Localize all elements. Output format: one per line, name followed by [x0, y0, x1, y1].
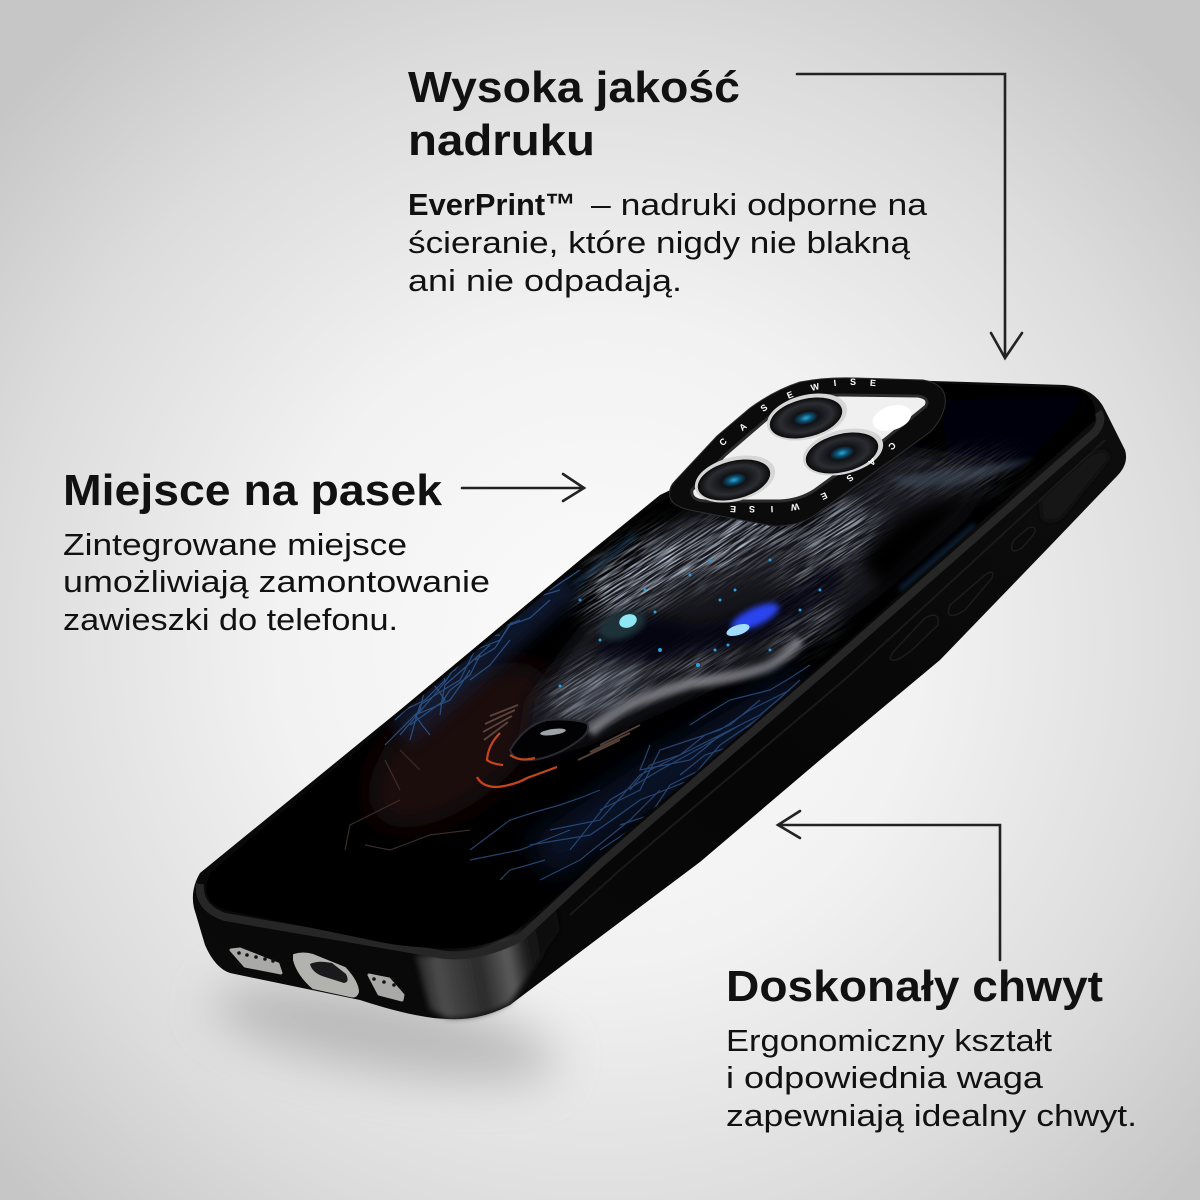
brand lettering: W	[789, 501, 800, 513]
brand lettering: C	[717, 436, 729, 448]
rim highlight	[200, 412, 1100, 955]
right lens	[798, 421, 888, 483]
body text: umożliwiają zamontowanie	[63, 564, 490, 599]
brand lettering: E	[819, 490, 829, 502]
body text	[408, 187, 928, 298]
brand lettering: E	[785, 389, 795, 401]
left eye	[598, 606, 647, 642]
mouth hair	[483, 705, 640, 760]
blue side glow	[575, 525, 975, 590]
flash	[869, 400, 915, 436]
brand lettering: E	[870, 378, 876, 388]
arrow: strap slot	[462, 474, 584, 501]
left vein glow	[400, 580, 570, 730]
case body	[193, 380, 1126, 1019]
wolf head fill	[520, 450, 1000, 760]
left blue veins	[385, 570, 580, 745]
brand lettering: C	[886, 440, 898, 452]
right speaker holes	[372, 977, 396, 987]
dark eye band	[595, 560, 845, 665]
camera glass	[692, 395, 927, 501]
top lens	[762, 386, 852, 448]
body text: ani nie odpadają.	[408, 263, 682, 298]
body text: Ergonomiczny kształt	[726, 1023, 1052, 1058]
brand lettering: S	[845, 472, 855, 484]
camera plate	[670, 377, 945, 526]
body text: zapewniają idealny chwyt.	[726, 1098, 1137, 1133]
mouth red outline	[477, 733, 557, 787]
reddish muzzle glow	[362, 659, 545, 835]
right glowing eye	[725, 598, 782, 638]
ear shadow	[860, 490, 980, 590]
body text: ścieranie, które nigdy nie blakną	[408, 225, 911, 260]
arrow: print quality	[797, 74, 1022, 358]
body text	[726, 1023, 1137, 1133]
left speaker	[231, 949, 281, 973]
heading: Miejsce na pasek	[63, 466, 443, 515]
charging port	[294, 954, 358, 996]
body text: zawieszki do telefonu.	[63, 602, 398, 637]
body text: i odpowiednia waga	[726, 1060, 1044, 1095]
heading: nadruku	[408, 116, 595, 165]
nose highlight	[540, 728, 566, 736]
muzzle upper fur	[553, 656, 646, 722]
arrow: grip	[778, 811, 1000, 960]
brand lettering: A	[866, 456, 878, 468]
body text: Zintegrowane miejsce	[63, 527, 407, 562]
body text	[63, 527, 490, 637]
callout: strap slot	[63, 466, 490, 637]
bottom ports	[231, 949, 403, 1000]
body text: EverPrint™	[408, 187, 576, 222]
right vein glow	[540, 690, 805, 860]
brand lettering: S	[749, 504, 755, 514]
brand lettering: W	[810, 381, 821, 393]
side button lower	[890, 615, 938, 660]
brown lower branches	[345, 750, 470, 850]
heading	[408, 63, 740, 165]
heading: Wysoka jakość	[408, 63, 740, 112]
nose	[510, 719, 588, 760]
heading: Doskonały chwyt	[726, 962, 1103, 1011]
right speaker	[369, 975, 403, 1000]
phone case	[192, 377, 1126, 1022]
sparkles	[558, 558, 822, 688]
artwork	[206, 383, 1096, 948]
navy corner	[942, 396, 1080, 469]
power button bump	[1040, 451, 1108, 521]
right blue veins	[470, 665, 810, 880]
callout: print quality	[408, 63, 928, 298]
brand lettering: E	[730, 504, 736, 514]
fur texture	[532, 444, 1028, 731]
ear edge	[885, 458, 1035, 488]
mute switch	[1012, 527, 1035, 551]
charging hole	[310, 962, 348, 983]
art base	[190, 370, 1110, 970]
brand lettering	[717, 377, 898, 514]
phone shadow	[206, 962, 564, 1102]
sidewall groove	[570, 440, 1105, 915]
left lens	[690, 448, 780, 510]
corner gloss	[415, 905, 560, 1018]
body text: – nadruki odporne na	[591, 187, 928, 222]
side button upper	[948, 572, 993, 616]
brand lettering: I	[771, 504, 773, 514]
muzzle light streak	[590, 640, 800, 732]
brand lettering: I	[833, 378, 837, 388]
plate frame	[670, 378, 945, 526]
brand lettering: S	[759, 402, 769, 414]
brand lettering: A	[737, 421, 749, 433]
brand lettering: S	[850, 377, 856, 387]
callout: grip	[726, 962, 1137, 1133]
left speaker holes	[237, 951, 275, 963]
